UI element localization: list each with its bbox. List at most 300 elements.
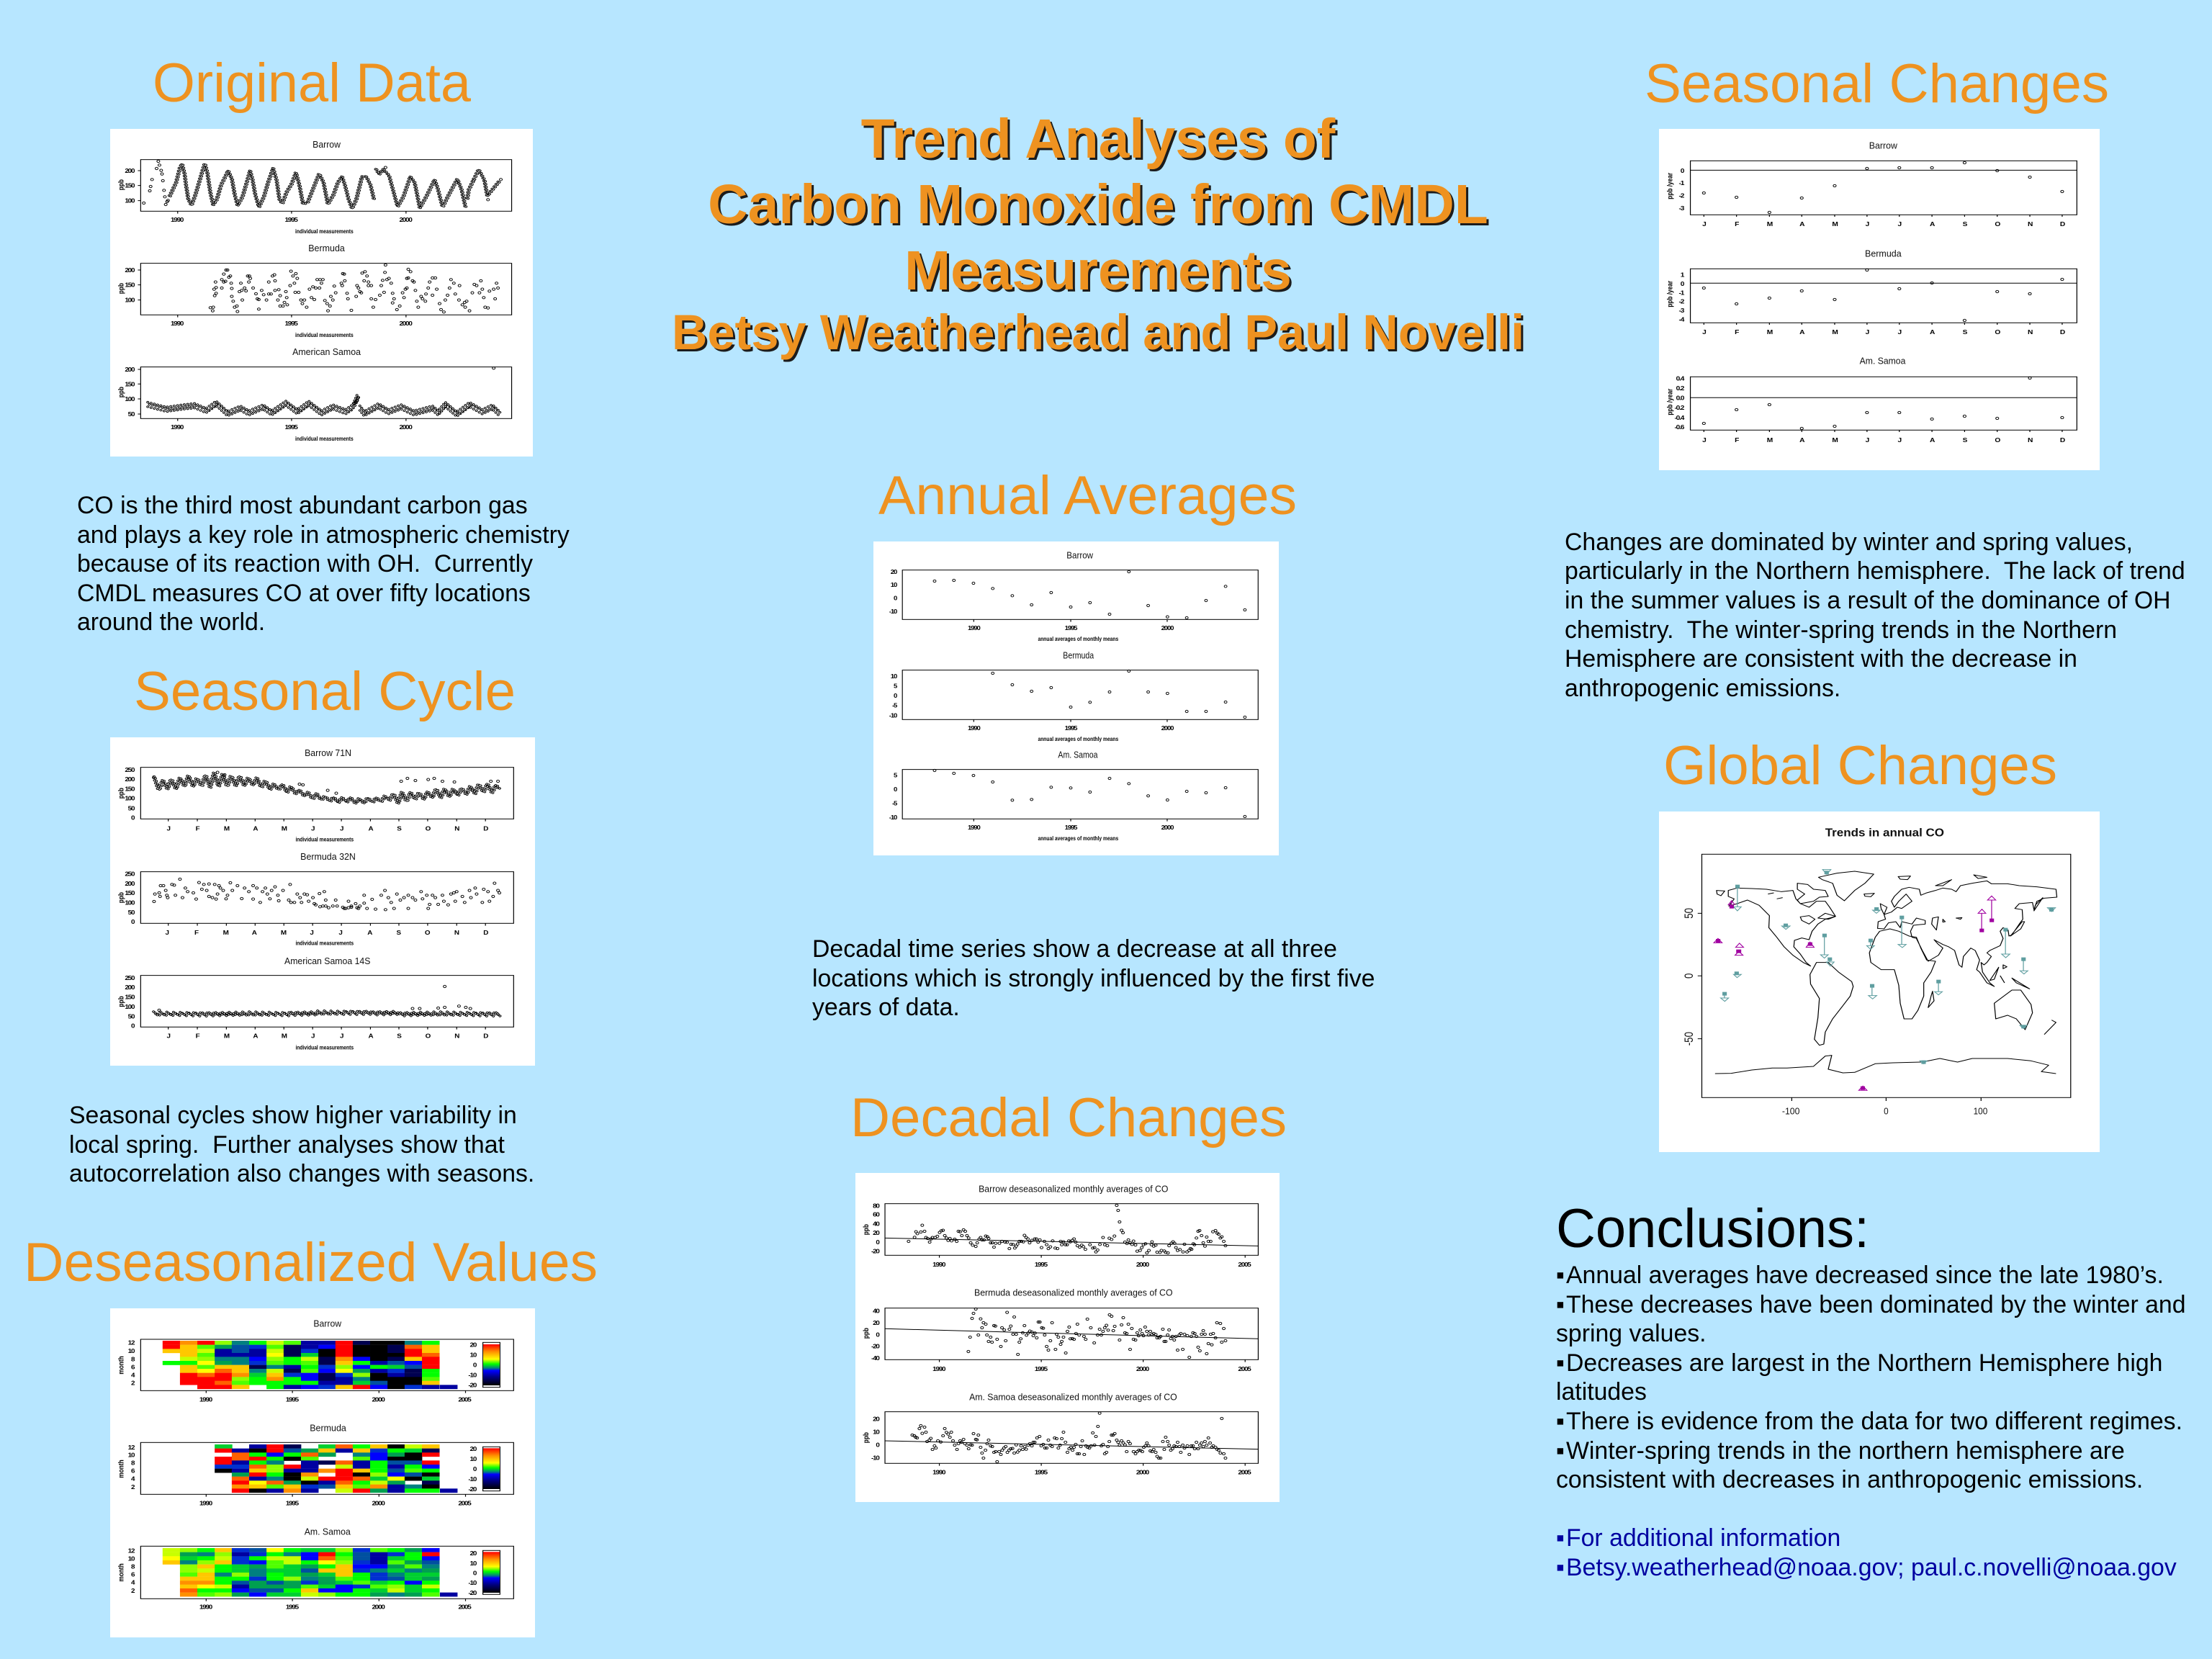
text block: intro to CO: around the world.	[77, 608, 265, 636]
chart: Barrow heat map: Barrow	[313, 1319, 341, 1329]
chart: Am. Samoa monthly trends: O	[1995, 437, 2000, 444]
chart: Am. Samoa annual averages: 5	[894, 772, 897, 778]
text block: conclusions list: spring values.	[1556, 1320, 1707, 1347]
chart: Bermuda monthly trends: -1	[1679, 289, 1684, 296]
chart: Am. Samoa annual averages: -10	[889, 814, 897, 821]
chart: Am. Samoa annual averages	[889, 750, 1258, 842]
world map coastlines	[1715, 871, 2057, 1074]
chart: American Samoa 14S seasonal cycle: American Samoa 14S	[284, 956, 371, 967]
chart: Barrow monthly trends: D	[2060, 221, 2066, 228]
chart: Am. Samoa monthly trends: J	[1702, 437, 1707, 444]
chart: Am. Samoa heat map: month	[117, 1563, 125, 1582]
chart: Am. Samoa monthly trends: J	[1898, 437, 1902, 444]
colour scale: Bermuda: -10	[468, 1476, 477, 1483]
text block: intro to CO: CO is the third most abundant carbon gas	[77, 492, 528, 519]
colour scale: Barrow: 0	[473, 1362, 477, 1368]
chart: Barrow deseasonalized monthly averages: 2000	[1136, 1262, 1149, 1268]
chart: Bermuda annual averages: -5	[892, 702, 897, 709]
text block: conclusions list: latitudes	[1556, 1378, 1647, 1406]
chart: Bermuda monthly trends: -4	[1679, 316, 1685, 323]
colour scale: Am. Samoa: 20	[470, 1550, 477, 1557]
chart: Bermuda monthly trends: 1	[1681, 271, 1684, 278]
chart: American Samoa 14S seasonal cycle: 0	[131, 1022, 135, 1029]
chart: Am. Samoa heat map: 1990	[199, 1604, 212, 1610]
text block: conclusions list: ▪Winter-spring trends in the northern hemisphere are	[1556, 1437, 2125, 1465]
chart: Barrow heat map: 6	[131, 1364, 135, 1370]
chart: American Samoa 14S seasonal cycle: 150	[125, 994, 135, 1000]
chart: Barrow individual measurements: Barrow	[313, 140, 341, 150]
markers: increasing trend sites (purple)	[1714, 896, 1996, 1090]
chart: Bermuda annual averages: annual averages of monthly means	[1038, 736, 1118, 742]
chart: American Samoa 14S seasonal cycle: J	[340, 1033, 343, 1039]
chart: Bermuda deseasonalized monthly averages: 40	[873, 1308, 880, 1314]
map frame and axes: 100	[1974, 1107, 1987, 1117]
chart: Barrow annual averages: Barrow	[1066, 551, 1094, 561]
chart: Am. Samoa monthly trends: D	[2060, 437, 2066, 444]
chart: Barrow 71N seasonal cycle: 200	[125, 776, 135, 783]
panel: decadal changes charts	[855, 1173, 1280, 1502]
chart: Bermuda heat map: 8	[131, 1460, 135, 1466]
text block: conclusions list: ▪These decreases have been dominated by the winter and	[1556, 1291, 2186, 1318]
text block: seasonal changes notes: Changes are dominated by winter and spring values,	[1565, 529, 2133, 556]
heading: Deseasonalized Values: Deseasonalized Values	[24, 1232, 598, 1293]
chart: Bermuda 32N seasonal cycle: O	[425, 930, 430, 936]
colour scale: Barrow: 20	[470, 1341, 477, 1348]
chart: Bermuda 32N seasonal cycle: N	[454, 930, 459, 936]
chart: Bermuda heat map: 1995	[286, 1500, 299, 1506]
chart: Barrow deseasonalized monthly averages: 1990	[932, 1262, 945, 1268]
chart: Am. Samoa heat map: 2000	[372, 1604, 385, 1610]
text block: intro to CO: CMDL measures CO at over fifty locations	[77, 580, 531, 607]
heading: Original Data: Original Data	[153, 53, 471, 114]
text block: seasonal changes notes: Hemisphere are consistent with the decrease in	[1565, 645, 2077, 673]
text block: decadal time series note: years of data.	[812, 994, 960, 1021]
panel: global changes map	[1659, 811, 2100, 1152]
chart: Am. Samoa annual averages: 0	[894, 786, 897, 793]
chart: Bermuda heat map: Bermuda	[310, 1424, 347, 1434]
chart: Bermuda 32N seasonal cycle	[117, 852, 513, 946]
chart: Barrow monthly trends: -2	[1679, 193, 1684, 199]
chart: Bermuda heat map: 1990	[199, 1500, 212, 1506]
text block: seasonal cycle notes: local spring. Further analyses show that	[69, 1131, 505, 1159]
chart: Am. Samoa deseasonalized monthly averages: 1995	[1035, 1469, 1048, 1475]
chart: Bermuda 32N seasonal cycle: Bermuda 32N	[300, 852, 356, 863]
chart: Barrow 71N seasonal cycle: ppb	[117, 788, 125, 799]
chart: Bermuda annual averages: 5	[894, 683, 897, 690]
chart: Am. Samoa annual averages: 2000	[1161, 824, 1174, 831]
chart: American Samoa individual measurements: 100	[125, 396, 135, 403]
title block: Carbon Monoxide from CMDL	[708, 174, 1488, 235]
chart: Am. Samoa monthly trends: M	[1832, 437, 1838, 444]
chart: Bermuda deseasonalized monthly averages: -40	[871, 1355, 880, 1362]
chart: Barrow monthly trends: S	[1963, 221, 1967, 228]
chart: American Samoa 14S seasonal cycle: F	[196, 1033, 200, 1039]
chart: Bermuda annual averages: 2000	[1161, 725, 1174, 732]
chart: Bermuda deseasonalized monthly averages: Bermuda deseasonalized monthly averages of CO	[974, 1287, 1173, 1298]
chart: Barrow monthly trends: J	[1898, 221, 1902, 228]
chart: Bermuda monthly trends: -2	[1679, 298, 1684, 305]
chart: Am. Samoa deseasonalized monthly averages: 20	[873, 1416, 880, 1422]
chart: Bermuda monthly trends: A	[1930, 329, 1936, 336]
chart: Barrow 71N seasonal cycle: 100	[125, 795, 135, 801]
chart: Bermuda heat map	[117, 1424, 513, 1506]
chart: Bermuda heat map: 2005	[458, 1500, 472, 1506]
text block: decadal time series note: locations which is strongly influenced by the first five	[812, 965, 1375, 992]
colour scale: Bermuda: 10	[470, 1456, 477, 1462]
chart: Am. Samoa annual averages: 1990	[968, 824, 981, 831]
chart: Am. Samoa annual averages: 1995	[1065, 824, 1078, 831]
chart: Barrow 71N seasonal cycle: Barrow 71N	[305, 748, 351, 759]
chart: Am. Samoa heat map: 6	[131, 1571, 135, 1578]
chart: Am. Samoa heat map: 8	[131, 1563, 135, 1570]
colour scale: Barrow: 10	[470, 1352, 477, 1358]
chart: American Samoa 14S seasonal cycle: individual measurements	[295, 1044, 354, 1051]
chart: Barrow individual measurements: 1995	[285, 217, 298, 223]
map frame and axes: 50	[1683, 908, 1696, 919]
text block: contact information: ▪Betsy.weatherhead@noaa.gov; paul.c.novelli@noaa.gov	[1556, 1554, 2177, 1581]
chart: Barrow annual averages: 1995	[1065, 625, 1078, 631]
chart: American Samoa 14S seasonal cycle	[117, 956, 513, 1051]
chart: Am. Samoa monthly trends: S	[1963, 437, 1967, 444]
chart: Am. Samoa heat map: 2	[131, 1588, 135, 1594]
text block: contact information: ▪For additional information	[1556, 1524, 1840, 1552]
chart: Barrow annual averages	[889, 551, 1258, 642]
chart: Barrow deseasonalized monthly averages: 60	[873, 1211, 880, 1218]
chart: Bermuda individual measurements: 1990	[171, 320, 184, 327]
chart: Bermuda monthly trends: -3	[1679, 307, 1684, 314]
heading: Seasonal Cycle: Seasonal Cycle	[134, 661, 516, 722]
colour scale: Am. Samoa: 10	[470, 1560, 477, 1567]
chart: Barrow 71N seasonal cycle: A	[368, 825, 374, 832]
chart: Barrow heat map: 1990	[199, 1396, 212, 1403]
chart: Barrow monthly trends: N	[2028, 221, 2033, 228]
chart: Bermuda 32N seasonal cycle: J	[166, 930, 169, 936]
chart: American Samoa 14S seasonal cycle: A	[368, 1033, 374, 1039]
text block: seasonal cycle notes: Seasonal cycles show higher variability in	[69, 1102, 517, 1129]
chart: Bermuda monthly trends: S	[1963, 329, 1967, 336]
chart: Bermuda deseasonalized monthly averages: -20	[871, 1343, 880, 1349]
text block: conclusions list: ▪Annual averages have decreased since the late 1980’s.	[1556, 1262, 2164, 1289]
text block: conclusions list: ▪There is evidence from the data for two different regimes.	[1556, 1408, 2182, 1435]
panel: deseasonalized heat maps	[110, 1308, 535, 1637]
chart: Am. Samoa monthly trends: -0.2	[1675, 405, 1684, 411]
chart: Bermuda deseasonalized monthly averages: 2000	[1136, 1366, 1149, 1372]
colour scale: Barrow: -20	[468, 1382, 477, 1388]
chart: Barrow 71N seasonal cycle: 250	[125, 767, 135, 773]
chart: Barrow deseasonalized monthly averages: 80	[873, 1202, 880, 1209]
chart: Barrow individual measurements: 150	[125, 182, 135, 189]
colour scale: Am. Samoa: 0	[473, 1570, 477, 1576]
chart: Barrow monthly trends	[1666, 141, 2077, 228]
markers: decreasing trend sites (teal)	[1721, 870, 2056, 1064]
chart: American Samoa 14S seasonal cycle: 100	[125, 1004, 135, 1010]
chart: American Samoa individual measurements: 1995	[285, 424, 298, 431]
chart: Barrow individual measurements: 1990	[171, 217, 184, 223]
chart: Barrow 71N seasonal cycle	[117, 748, 513, 842]
map frame and axes: 0	[1683, 974, 1696, 979]
chart: Am. Samoa monthly trends: 0.4	[1676, 375, 1685, 382]
chart: Bermuda deseasonalized monthly averages: 1995	[1035, 1366, 1048, 1372]
chart: Am. Samoa heat map: Am. Samoa	[305, 1527, 351, 1537]
chart: Bermuda individual measurements: ppb	[117, 283, 125, 294]
chart: American Samoa individual measurements: 150	[125, 381, 135, 387]
colour scale: Bermuda: 0	[473, 1466, 477, 1473]
chart: Am. Samoa deseasonalized monthly averages: -10	[871, 1455, 880, 1461]
colour scale: Am. Samoa: -20	[468, 1590, 477, 1596]
chart: Am. Samoa monthly trends	[1666, 356, 2077, 444]
chart: Am. Samoa monthly trends: A	[1799, 437, 1805, 444]
chart: Barrow 71N seasonal cycle: S	[397, 825, 402, 832]
chart: Barrow monthly trends: 0	[1681, 168, 1684, 174]
text block: seasonal changes notes: chemistry. The winter-spring trends in the Northern	[1565, 616, 2117, 644]
chart: American Samoa 14S seasonal cycle: M	[224, 1033, 229, 1039]
heading: Conclusions: Conclusions:	[1556, 1198, 1869, 1259]
colour scale: Am. Samoa: -10	[468, 1580, 477, 1586]
chart: Bermuda annual averages: 1995	[1065, 725, 1078, 732]
chart: Bermuda monthly trends: 0	[1681, 281, 1684, 287]
chart: Am. Samoa monthly trends: A	[1930, 437, 1936, 444]
chart: Bermuda monthly trends: M	[1767, 329, 1773, 336]
chart: Bermuda monthly trends: Bermuda	[1865, 249, 1902, 259]
heading: Annual Averages: Annual Averages	[878, 465, 1297, 526]
chart: Am. Samoa heat map: 4	[131, 1579, 135, 1586]
chart: Barrow 71N seasonal cycle: 150	[125, 786, 135, 792]
chart: Barrow individual measurements: individual measurements	[295, 228, 354, 235]
chart: Bermuda 32N seasonal cycle: individual measurements	[295, 940, 354, 946]
chart: Bermuda heat map: 2	[131, 1484, 135, 1491]
chart: Barrow individual measurements	[117, 140, 512, 235]
chart: Bermuda monthly trends: M	[1832, 329, 1838, 336]
chart: Barrow 71N seasonal cycle: F	[196, 825, 200, 832]
chart: Barrow 71N seasonal cycle: 0	[131, 814, 135, 821]
chart: American Samoa individual measurements: American Samoa	[292, 347, 361, 358]
chart: Bermuda 32N seasonal cycle: ppb	[117, 892, 125, 903]
chart: Bermuda 32N seasonal cycle: J	[310, 930, 314, 936]
colour scale: Bermuda: -20	[468, 1486, 477, 1493]
chart: Barrow deseasonalized monthly averages: 40	[873, 1220, 880, 1227]
chart: Barrow monthly trends: Barrow	[1869, 141, 1897, 151]
chart: Barrow individual measurements: 2000	[399, 217, 413, 223]
chart: Bermuda heat map: 6	[131, 1467, 135, 1474]
chart: Bermuda annual averages: Bermuda	[1063, 651, 1094, 661]
chart: Bermuda individual measurements: 150	[125, 282, 135, 288]
chart: Barrow heat map: 2000	[372, 1396, 385, 1403]
chart: Barrow heat map: 1995	[286, 1396, 299, 1403]
chart: Bermuda annual averages: -10	[889, 712, 897, 719]
chart: Bermuda 32N seasonal cycle: 200	[125, 881, 135, 887]
chart: Bermuda heat map: 4	[131, 1475, 135, 1482]
chart: Bermuda monthly trends: O	[1995, 329, 2000, 336]
chart: Bermuda 32N seasonal cycle: F	[194, 930, 199, 936]
chart: Bermuda monthly trends	[1666, 249, 2077, 336]
chart: Barrow 71N seasonal cycle: A	[253, 825, 258, 832]
chart: Barrow annual averages: 20	[891, 569, 897, 575]
chart: Bermuda 32N seasonal cycle: 50	[128, 909, 135, 916]
chart: Am. Samoa deseasonalized monthly averages: Am. Samoa deseasonalized monthly averages of CO	[969, 1392, 1177, 1403]
chart: Am. Samoa deseasonalized monthly averages: 2000	[1136, 1469, 1149, 1475]
chart: Am. Samoa deseasonalized monthly averages: 1990	[932, 1469, 945, 1475]
chart: Barrow monthly trends: A	[1930, 221, 1936, 228]
chart: American Samoa 14S seasonal cycle: ppb	[117, 996, 125, 1007]
chart: Bermuda deseasonalized monthly averages	[862, 1287, 1258, 1372]
chart: Barrow monthly trends: F	[1735, 221, 1740, 228]
chart: Barrow annual averages: 1990	[968, 625, 981, 631]
chart: Am. Samoa monthly trends: M	[1767, 437, 1773, 444]
chart: Am. Samoa monthly trends: 0.2	[1676, 385, 1684, 392]
chart: American Samoa 14S seasonal cycle: N	[454, 1033, 459, 1039]
chart: Bermuda monthly trends: A	[1799, 329, 1805, 336]
chart: Am. Samoa monthly trends: F	[1735, 437, 1740, 444]
chart: Bermuda 32N seasonal cycle: S	[396, 930, 401, 936]
chart: Bermuda annual averages: 0	[894, 693, 897, 699]
chart: Barrow monthly trends: O	[1995, 221, 2000, 228]
chart: Bermuda deseasonalized monthly averages: 20	[873, 1320, 880, 1326]
chart: Am. Samoa deseasonalized monthly averages	[862, 1392, 1258, 1475]
chart: Bermuda 32N seasonal cycle: J	[338, 930, 343, 936]
chart: American Samoa 14S seasonal cycle: J	[311, 1033, 315, 1039]
chart: Am. Samoa monthly trends: Am. Samoa	[1860, 356, 1906, 367]
text block: decadal time series note: Decadal time series show a decrease at all three	[812, 935, 1337, 963]
chart: Barrow monthly trends: -1	[1679, 180, 1684, 186]
chart: Barrow deseasonalized monthly averages: 1995	[1035, 1262, 1048, 1268]
chart: Bermuda 32N seasonal cycle: A	[367, 930, 373, 936]
chart: Bermuda individual measurements: 200	[125, 267, 135, 274]
chart: Am. Samoa monthly trends: J	[1866, 437, 1869, 444]
chart: American Samoa 14S seasonal cycle: J	[167, 1033, 171, 1039]
chart: Am. Samoa heat map: 2005	[458, 1604, 472, 1610]
chart: Bermuda 32N seasonal cycle: M	[223, 930, 228, 936]
chart: Barrow monthly trends: J	[1866, 221, 1869, 228]
chart: Barrow deseasonalized monthly averages: 2005	[1238, 1262, 1251, 1268]
chart: Bermuda monthly trends: D	[2060, 329, 2066, 336]
chart: Barrow heat map	[117, 1319, 513, 1403]
chart: Barrow annual averages: annual averages of monthly means	[1038, 636, 1118, 642]
chart: Barrow 71N seasonal cycle: O	[426, 825, 431, 832]
chart: Barrow deseasonalized monthly averages: Barrow deseasonalized monthly averages of CO	[979, 1184, 1168, 1195]
chart: Barrow heat map: 4	[131, 1372, 135, 1378]
chart: Am. Samoa heat map: 1995	[286, 1604, 299, 1610]
chart: Bermuda heat map: 10	[128, 1452, 135, 1458]
heading: Decadal Changes: Decadal Changes	[850, 1087, 1287, 1148]
chart: Barrow monthly trends: J	[1702, 221, 1707, 228]
chart: American Samoa individual measurements	[117, 347, 512, 442]
chart: American Samoa 14S seasonal cycle: D	[483, 1033, 489, 1039]
chart: Bermuda heat map: 2000	[372, 1500, 385, 1506]
colour scale: Bermuda: 20	[470, 1446, 477, 1452]
chart: Barrow 71N seasonal cycle: J	[340, 825, 343, 832]
chart: Bermuda 32N seasonal cycle: D	[483, 930, 489, 936]
chart: Am. Samoa monthly trends: -0.4	[1675, 415, 1685, 421]
chart: Bermuda monthly trends: J	[1898, 329, 1902, 336]
chart: American Samoa 14S seasonal cycle: A	[253, 1033, 258, 1039]
chart: Barrow annual averages: 10	[891, 582, 897, 588]
colour scale: Barrow	[468, 1341, 500, 1388]
chart: Barrow 71N seasonal cycle: 50	[128, 805, 135, 811]
chart: Barrow heat map: month	[117, 1356, 125, 1375]
chart: Am. Samoa heat map: 10	[128, 1555, 135, 1562]
panel: seasonal changes charts	[1659, 129, 2100, 470]
map frame and axes: 0	[1884, 1107, 1889, 1117]
chart: Am. Samoa deseasonalized monthly averages: 0	[876, 1442, 880, 1448]
map frame and axes: -100	[1782, 1107, 1799, 1117]
chart: Bermuda annual averages: 10	[891, 673, 897, 680]
chart: Am. Samoa monthly trends: N	[2028, 437, 2033, 444]
chart: Barrow deseasonalized monthly averages: 20	[873, 1230, 880, 1236]
chart: Barrow individual measurements: 100	[125, 197, 135, 204]
chart: Barrow annual averages: 0	[894, 595, 897, 602]
chart: Barrow individual measurements: ppb	[117, 179, 125, 190]
chart: Barrow heat map: 10	[128, 1348, 135, 1354]
chart: Bermuda 32N seasonal cycle: 0	[131, 919, 135, 925]
chart: Bermuda 32N seasonal cycle: M	[281, 930, 286, 936]
chart: American Samoa 14S seasonal cycle: 50	[128, 1013, 135, 1020]
chart: Barrow deseasonalized monthly averages: ppb	[862, 1224, 870, 1235]
chart: Bermuda heat map: month	[117, 1460, 125, 1478]
chart: Bermuda heat map: 12	[128, 1444, 135, 1451]
chart: Barrow 71N seasonal cycle: J	[167, 825, 171, 832]
text block: conclusions list: ▪Decreases are largest in the Northern Hemisphere high	[1556, 1349, 2162, 1377]
chart: Bermuda individual measurements: 1995	[285, 320, 298, 327]
panel: annual averages charts	[873, 541, 1279, 855]
chart: Barrow 71N seasonal cycle: J	[311, 825, 315, 832]
chart: Bermuda individual measurements	[117, 243, 512, 338]
chart: Bermuda annual averages: 1990	[968, 725, 981, 732]
chart: Bermuda monthly trends: N	[2028, 329, 2033, 336]
chart: Am. Samoa heat map: 12	[128, 1547, 135, 1554]
chart: Barrow monthly trends: M	[1767, 221, 1773, 228]
chart: Bermuda individual measurements: 100	[125, 297, 135, 303]
chart: Am. Samoa deseasonalized monthly averages: 10	[873, 1429, 880, 1435]
chart: Barrow heat map: 8	[131, 1356, 135, 1362]
text block: conclusions list: consistent with decreases in anthropogenic emissions.	[1556, 1466, 2143, 1493]
chart: American Samoa individual measurements: individual measurements	[295, 436, 354, 442]
chart: Barrow heat map: 2005	[458, 1396, 472, 1403]
title block	[672, 108, 1524, 360]
chart: Am. Samoa monthly trends: -0.6	[1675, 424, 1684, 431]
chart: Bermuda monthly trends: J	[1866, 329, 1869, 336]
chart: Bermuda monthly trends: ppb /year	[1666, 280, 1674, 307]
heading: Seasonal Changes: Seasonal Changes	[1645, 53, 2109, 114]
chart: Barrow monthly trends: M	[1832, 221, 1838, 228]
title block: Betsy Weatherhead and Paul Novelli	[672, 305, 1524, 360]
map frame and axes	[1683, 854, 2071, 1117]
chart: American Samoa individual measurements: ppb	[117, 387, 125, 397]
text block: intro to CO: because of its reaction with OH. Currently	[77, 550, 533, 577]
chart: Barrow 71N seasonal cycle: D	[483, 825, 489, 832]
chart: Bermuda deseasonalized monthly averages: 2005	[1238, 1366, 1251, 1372]
chart: Am. Samoa heat map	[117, 1527, 513, 1610]
chart: Bermuda annual averages	[889, 651, 1258, 742]
chart: Barrow deseasonalized monthly averages: -20	[871, 1248, 880, 1254]
chart: Bermuda individual measurements: Bermuda	[308, 243, 346, 254]
chart: Barrow annual averages: 2000	[1161, 625, 1174, 631]
chart: Barrow 71N seasonal cycle: M	[224, 825, 229, 832]
chart: Am. Samoa annual averages: Am. Samoa	[1058, 750, 1098, 760]
chart: Bermuda monthly trends: J	[1702, 329, 1707, 336]
title block: Measurements	[904, 240, 1292, 302]
map frame and axes: -50	[1683, 1032, 1696, 1046]
chart: Bermuda deseasonalized monthly averages: ppb	[862, 1328, 870, 1339]
chart: American Samoa 14S seasonal cycle: O	[426, 1033, 431, 1039]
panel: original data charts	[110, 129, 533, 457]
chart: Bermuda individual measurements: 2000	[399, 320, 413, 327]
chart: Barrow individual measurements: 200	[125, 168, 135, 174]
chart: American Samoa individual measurements: 50	[128, 411, 135, 418]
chart: American Samoa 14S seasonal cycle: M	[282, 1033, 287, 1039]
colour scale: Am. Samoa	[468, 1550, 500, 1596]
chart: American Samoa individual measurements: 1990	[171, 424, 184, 431]
panel: seasonal cycle charts	[110, 737, 535, 1066]
